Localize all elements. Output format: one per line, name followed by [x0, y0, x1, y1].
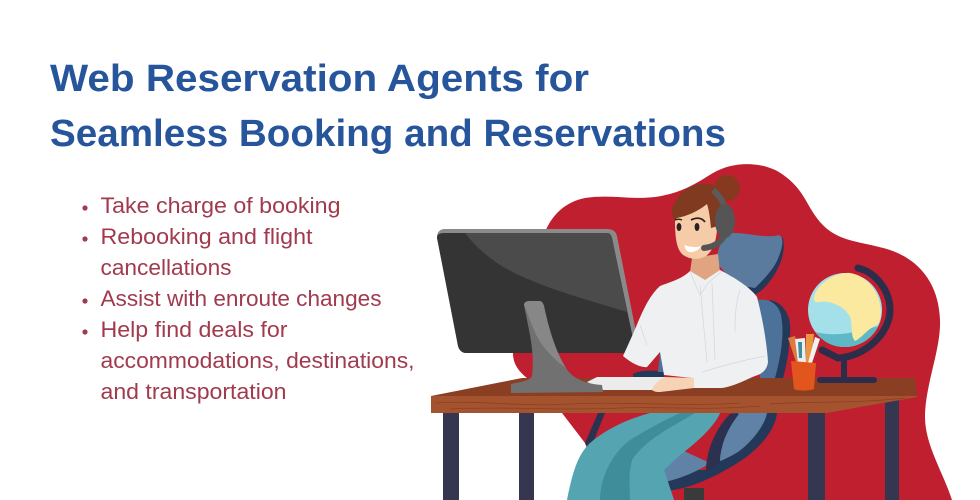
monitor frame — [437, 229, 639, 353]
globe arc and stand — [822, 268, 890, 358]
globe lower ocean — [816, 326, 878, 347]
monitor stand — [511, 301, 603, 393]
hair — [672, 184, 722, 228]
globe land — [814, 273, 881, 341]
jeans — [567, 413, 720, 500]
bullet: booking: Take charge of booking — [100, 193, 340, 218]
computer monitor — [437, 229, 639, 393]
smile — [684, 245, 701, 252]
hair bun — [714, 175, 740, 201]
pencil cup — [788, 334, 820, 390]
bullet list — [82, 193, 415, 404]
title: Web Reservation Agents for — [50, 58, 589, 100]
bullet: rebooking: Rebooking and flight — [100, 224, 313, 249]
keyboard — [587, 377, 665, 390]
title — [50, 58, 726, 155]
bullet: deals: Help find deals for — [100, 317, 288, 342]
bullet: rebooking: cancellations — [100, 255, 232, 280]
bullet: deals: accommodations, destinations, — [100, 348, 414, 373]
monitor back — [437, 233, 635, 353]
globe sphere — [808, 273, 882, 347]
hand — [652, 377, 694, 392]
desk front edge — [431, 396, 917, 413]
red background blob — [513, 164, 952, 500]
eyes and brows — [675, 218, 705, 231]
shirt details — [640, 271, 765, 372]
cup — [791, 361, 816, 390]
bullet: deals: and transportation — [100, 379, 286, 404]
chair backrest — [765, 300, 790, 378]
bullet: enroute changes: Assist with enroute changes — [100, 286, 382, 311]
neck — [690, 254, 720, 282]
bullet: deals — [82, 317, 415, 404]
shirt — [623, 270, 768, 388]
chair headrest — [722, 238, 784, 295]
bullet: rebooking — [82, 224, 313, 280]
face — [675, 203, 717, 259]
desk — [431, 378, 917, 413]
agent — [623, 175, 768, 392]
globe — [808, 268, 890, 383]
chair arm near sleeve — [633, 371, 664, 377]
office chair — [585, 233, 790, 500]
desk top surface — [431, 378, 917, 397]
monitor sheen — [465, 233, 627, 312]
chair seat and arm — [620, 413, 777, 490]
title: Seamless Booking and Reservations — [50, 113, 726, 155]
desk legs — [443, 400, 899, 500]
pens — [788, 336, 802, 362]
chair post — [684, 488, 704, 500]
headset — [704, 190, 735, 248]
